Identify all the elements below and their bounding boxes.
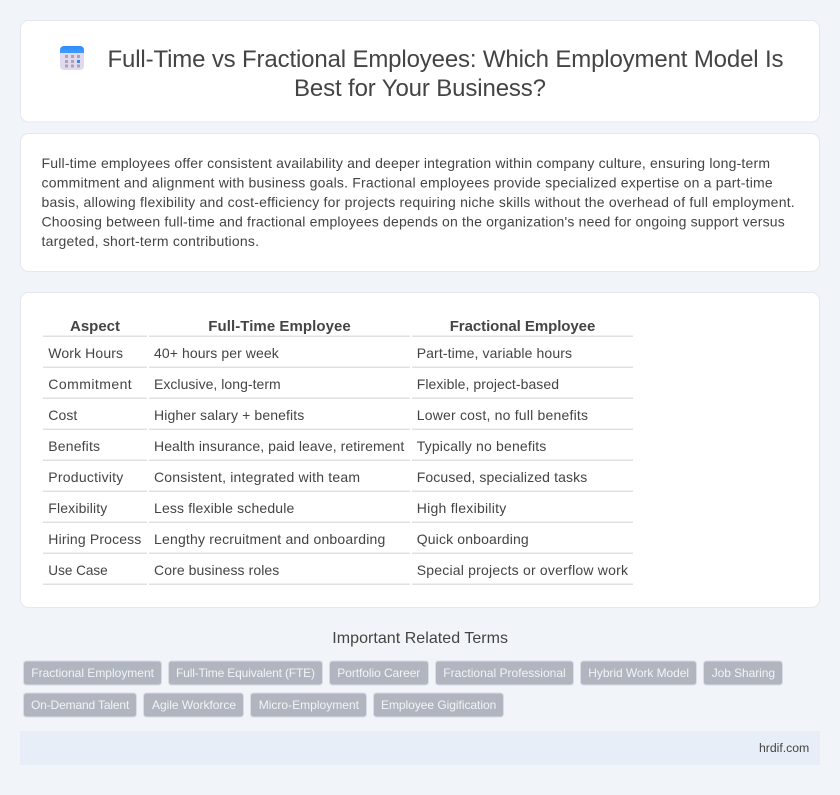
table row: hiring process: Quick onboarding [417,531,529,547]
text block: introduction paragraph: basis, allowing flexibility and cost-efficiency for projects requiring niche skills without the overhead of full employment. [42,194,795,210]
tag: agile workforce: Agile Workforce [152,698,236,712]
table row: use case: Special projects or overflow work [417,562,629,578]
table row: cost: Cost [48,407,77,423]
tag: fractional professional [436,661,574,685]
table row: productivity: Focused, specialized tasks [417,469,587,485]
table row: flexibility: High flexibility [417,500,506,516]
tag: hybrid work model: Hybrid Work Model [588,666,689,680]
table row: benefits [43,438,633,461]
table row: work hours: Part-time, variable hours [417,345,572,361]
tag: micro-employment: Micro-Employment [259,698,360,712]
tag: fractional professional: Fractional Professional [443,666,566,680]
table row: flexibility: Less flexible schedule [154,500,295,516]
text block: introduction paragraph: commitment and alignment with business goals. Fractional employees provide specialized expertise on a part-time [42,174,773,190]
table header: Fractional Employee [450,318,595,335]
tag: fractional employment [24,661,162,685]
table row: hiring process [43,531,633,554]
text block: introduction paragraph: targeted, short-term contributions. [42,233,259,249]
table row: cost: Lower cost, no full benefits [417,407,588,423]
table row: hiring process: Hiring Process [48,531,141,547]
table row: benefits: Benefits [48,438,100,454]
table row: commitment: Commitment [48,376,132,392]
text block: introduction paragraph: Choosing between full-time and fractional employees depends on the organization's need for ongoing support versus [42,214,785,230]
title [108,46,784,102]
table row: productivity: Consistent, integrated with team [154,469,360,485]
table header: Full-Time Employee [208,318,351,335]
tag: full-time equivalent: Full-Time Equivalent (FTE) [176,666,315,680]
table row: flexibility: Flexibility [48,500,107,516]
text block: introduction paragraph [42,155,795,249]
tag: agile workforce [144,693,244,717]
heading: important related terms: Important Related Terms [332,630,508,647]
table row: work hours [43,345,633,368]
table row: use case [43,562,633,585]
footer [20,731,820,765]
related term tags [24,661,782,717]
tag: hybrid work model [580,661,696,685]
footer: hrdif.com [759,741,809,755]
tag: job sharing: Job Sharing [712,666,775,680]
text block: introduction paragraph: Full-time employees offer consistent availability and deeper integration within company culture, ensuring long-term [42,155,770,171]
table row: work hours: 40+ hours per week [154,345,280,361]
table row: work hours: Work Hours [48,345,123,361]
tag: portfolio career [330,661,428,685]
table header: Aspect [70,318,120,335]
icon: calendar [60,46,84,70]
tag: fractional employment: Fractional Employment [31,666,155,680]
table row: benefits: Health insurance, paid leave, retirement [154,438,404,454]
table row: flexibility [43,500,633,523]
table row: commitment: Flexible, project-based [417,376,559,392]
panel: comparison table [20,292,820,608]
tag: full-time equivalent [168,661,322,685]
tag: job sharing [704,661,782,685]
table row: productivity [43,469,633,492]
tag: micro-employment [250,693,366,717]
table row: use case: Use Case [48,563,108,578]
tag: on-demand talent [24,693,136,717]
table row: cost [43,407,633,430]
panel: introduction [20,134,820,272]
tag: employee gigification: Employee Gigification [381,698,496,712]
table row: benefits: Typically no benefits [417,438,546,454]
table header [43,318,633,337]
table row: commitment [43,376,633,399]
table row: hiring process: Lengthy recruitment and onboarding [154,531,385,547]
table row: cost: Higher salary + benefits [154,407,304,423]
table row: productivity: Productivity [48,469,123,485]
panel: header [20,20,820,122]
title: Full-Time vs Fractional Employees: Which Employment Model Is [108,46,784,73]
tag: employee gigification [374,693,504,717]
tag: on-demand talent: On-Demand Talent [31,698,130,712]
table row: use case: Core business roles [154,562,279,578]
tag: portfolio career: Portfolio Career [337,666,420,680]
title: Best for Your Business? [294,75,546,102]
table row: commitment: Exclusive, long-term [154,376,281,392]
